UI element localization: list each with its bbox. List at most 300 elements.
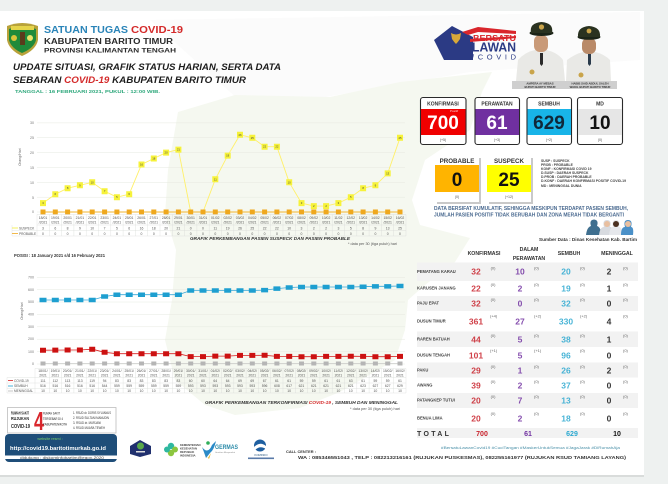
logo: Kominfo: KOMINFO — [254, 453, 268, 457]
chart: confirmed, recovered, deceased: 2021 — [113, 374, 121, 378]
chart: confirmed, recovered, deceased: 10 — [349, 389, 353, 393]
chart: suspeck and probable: 11/02 — [334, 216, 343, 220]
row: Raren Batuah: RAREN BATUAH — [417, 336, 450, 342]
chart: confirmed, recovered, deceased: 10 — [201, 389, 205, 393]
chart: suspeck and probable: 0 — [42, 232, 44, 236]
row: Dusun Timur: 361 — [469, 316, 483, 326]
portrait caption — [512, 81, 617, 89]
chart: confirmed, recovered, deceased: 2021 — [310, 374, 318, 378]
row: Karusen Janang: (0) — [623, 282, 629, 287]
chart: confirmed, recovered, deceased: 593 — [237, 384, 243, 388]
row: Paju Epat: (0) — [623, 297, 629, 302]
row: Karusen Janang: 22 — [471, 284, 481, 294]
chart: confirmed, recovered, deceased: 10 — [66, 389, 70, 393]
chart: suspeck and probable: 0 — [387, 232, 389, 236]
row: Dusun Tengah: 96 — [561, 350, 571, 360]
chart: suspeck and probable: 0 — [251, 232, 253, 236]
chart: suspeck and probable: 5 — [350, 226, 352, 230]
row: Pematang Karau: (0) — [623, 266, 629, 270]
chart: confirmed, recovered, deceased: 83 — [140, 379, 143, 383]
chart: confirmed, recovered, deceased: 2021 — [249, 374, 256, 378]
chart: confirmed, recovered, deceased: 25/01/ — [124, 369, 134, 373]
box: official website: website resmi : — [37, 437, 63, 441]
chart: suspeck and probable: 25 — [250, 226, 254, 230]
chart: confirmed, recovered, deceased: 2021 — [199, 374, 207, 378]
row: Patangkep Tutui: (0) — [580, 394, 586, 399]
chart: suspeck and probable: 21 — [177, 148, 180, 152]
chart: confirmed, recovered, deceased: 30/01/ — [186, 369, 195, 373]
chart: confirmed, recovered, deceased: 27/01/ — [149, 369, 159, 373]
row: Benua Lima: (0) — [534, 411, 540, 416]
row: Karusen Janang: KARUSEN JANANG — [417, 286, 456, 290]
chart: suspeck and probable: /2021 — [347, 220, 355, 224]
chart: suspeck and probable: 25 — [30, 136, 34, 140]
row: Dusun Timur: (0) — [623, 314, 629, 318]
chart: confirmed, recovered, deceased: 621 — [336, 384, 341, 388]
chart: suspeck and probable: /2021 — [199, 220, 207, 224]
chart: confirmed, recovered, deceased: 10 — [177, 389, 180, 393]
chart: confirmed, recovered, deceased: 10 — [361, 389, 365, 393]
chart: confirmed, recovered, deceased: 0 — [32, 362, 34, 366]
chart: suspeck and probable: /2021 — [76, 220, 84, 224]
row: Dusun Tengah: (+1) — [490, 348, 498, 353]
chart: suspeck and probable: 10 — [90, 226, 94, 230]
chart: suspeck and probable: 2 — [325, 226, 327, 230]
portrait: vice regent — [566, 26, 611, 81]
chart: suspeck and probable: 0 — [337, 232, 339, 236]
title — [13, 62, 281, 85]
stat card: sembuh: SEMBUH — [538, 102, 560, 108]
chart: confirmed, recovered, deceased: 16/02/ — [395, 369, 405, 373]
chart: confirmed, recovered, deceased: 61 — [398, 379, 402, 383]
chart: confirmed, recovered, deceased: 2021 — [76, 374, 84, 378]
chart: confirmed, recovered, deceased: 593 — [200, 384, 206, 388]
row: Pematang Karau: 32 — [471, 266, 481, 276]
chart: suspeck and probable: 0 — [128, 232, 130, 236]
heading: task force — [44, 24, 183, 54]
row: Paju Epat: (0) — [534, 297, 540, 302]
row: Awang: 0 — [607, 380, 612, 390]
row: Paku — [417, 364, 629, 376]
chart: confirmed, recovered, deceased: 26/01/ — [137, 369, 146, 373]
chart: suspeck and probable: 0 — [301, 232, 303, 236]
chart: suspeck and probable: 22/01 — [88, 216, 97, 220]
chart: confirmed, recovered, deceased: 20/01/ — [63, 369, 72, 373]
chart: suspeck and probable: 2 — [313, 226, 315, 230]
row: Awang: (0) — [623, 379, 629, 384]
chart: suspeck and probable: PROBABLE — [19, 232, 36, 236]
chart: confirmed, recovered, deceased: 2021 — [138, 374, 145, 378]
chart: confirmed, recovered, deceased: 10 — [152, 389, 156, 393]
row: Patangkep Tutui — [417, 394, 629, 406]
chart: suspeck and probable: 0 — [153, 232, 155, 236]
chart: confirmed, recovered, deceased: 10 — [287, 389, 291, 393]
logo: Kemenkes — [164, 443, 201, 458]
row: Dusun Tengah: (0) — [623, 348, 629, 353]
chart: suspeck and probable: 3 — [301, 226, 303, 230]
row: Benua Lima: BENUA LIMA — [417, 416, 443, 420]
chart: suspeck and probable: /2021 — [310, 220, 318, 224]
row: Paju Epat: 32 — [471, 298, 481, 308]
chart: confirmed, recovered, deceased: 600 — [28, 288, 34, 292]
icon: health workers — [586, 220, 633, 235]
row: Raren Batuah: 44 — [471, 334, 481, 344]
row: Dusun Timur: (+4) — [490, 314, 498, 318]
chart: suspeck and probable: 06/02 — [273, 216, 281, 220]
chart: suspeck and probable — [12, 121, 406, 236]
data source: Sumber Data : Dinas Kesehatan Kab. Bartim — [539, 237, 637, 242]
box: official website: didukung : diskominfobartim@egov-2020 — [20, 456, 104, 460]
row: Patangkep Tutui: PATANGKEP TUTUI — [417, 398, 455, 402]
chart: suspeck and probable: 22 — [263, 226, 267, 230]
chart: suspeck and probable: 10 — [287, 226, 291, 230]
chart: suspeck and probable: 02/02 — [223, 216, 232, 220]
chart: confirmed, recovered, deceased: 04/02/ — [248, 369, 257, 373]
chart: suspeck and probable: 0 — [141, 232, 143, 236]
chart: confirmed, recovered, deceased: 14/02/ — [371, 369, 380, 373]
row: Paju Epat: PAJU EPAT — [417, 300, 440, 306]
chart: suspeck and probable: 30/01 — [186, 216, 195, 220]
chart: confirmed, recovered, deceased: 13/02/ — [358, 369, 368, 373]
row: Dusun Tengah: 0 — [607, 350, 612, 360]
chart: confirmed, recovered, deceased: 09/02/ — [309, 369, 319, 373]
chart: suspeck and probable: 08/02 — [297, 216, 306, 220]
chart: confirmed, recovered, deceased: 2021 — [285, 374, 293, 378]
chart: suspeck and probable: /2021 — [211, 220, 220, 224]
chart: confirmed, recovered, deceased: 28/01/ — [161, 369, 171, 373]
chart: suspeck and probable: 3 — [42, 226, 44, 230]
chart: confirmed, recovered, deceased: 113 — [65, 379, 70, 383]
stat card: probable: (0) — [455, 195, 459, 199]
chart: confirmed, recovered, deceased: 2021 — [335, 374, 342, 378]
chart: confirmed, recovered, deceased: 593 — [225, 384, 231, 388]
chart: confirmed, recovered, deceased: 10 — [127, 389, 131, 393]
chart: suspeck and probable: 6 — [128, 192, 130, 196]
chart: suspeck and probable: 25/01 — [125, 216, 134, 220]
chart: confirmed, recovered, deceased: 559 — [126, 384, 132, 388]
row: Patangkep Tutui: (0) — [534, 394, 540, 399]
row: total: TOTAL — [417, 431, 451, 438]
logo: Bersatu Lawan Covid — [434, 26, 517, 62]
chart: confirmed, recovered, deceased: 10/02/ — [321, 369, 331, 373]
chart: confirmed, recovered, deceased: 10 — [90, 389, 94, 393]
chart: confirmed, recovered, deceased: 2021 — [150, 374, 158, 378]
stat card: suspeck: (+12) — [505, 195, 513, 199]
chart: suspeck and probable: 0 — [104, 232, 106, 236]
chart: suspeck and probable: 11 — [214, 226, 217, 230]
chart: confirmed, recovered, deceased: 10 — [41, 389, 45, 393]
period label: POSISI : 18 January 2021 s/d 16 February 2021 — [14, 253, 106, 258]
chart: confirmed, recovered, deceased: 2021 — [236, 374, 244, 378]
chart: suspeck and probable: /2021 — [100, 220, 109, 224]
logo: GERMAS: GERMAS — [215, 445, 238, 451]
row: Benua Lima: (0) — [491, 411, 496, 416]
row: Dusun Timur — [417, 314, 629, 326]
chart: suspeck and probable: 10 — [288, 180, 291, 184]
row: Paku: (0) — [491, 364, 496, 369]
row: Awang: 2 — [518, 380, 523, 390]
chart: confirmed, recovered, deceased: 2021 — [396, 374, 404, 378]
chart: confirmed, recovered, deceased: 2021 — [39, 374, 47, 378]
chart: suspeck and probable: 22 — [263, 145, 267, 149]
stat card: perawatan: (+3) — [494, 138, 500, 142]
chart: suspeck and probable: /2021 — [125, 220, 134, 224]
chart: confirmed, recovered, deceased: 2021 — [261, 374, 268, 378]
chart: confirmed, recovered, deceased: 59 — [374, 379, 377, 383]
row: Raren Batuah: (0) — [623, 333, 629, 338]
row: Karusen Janang: (0) — [534, 282, 540, 287]
row: total: 700 — [476, 431, 488, 438]
chart: suspeck and probable: 28/01 — [162, 216, 170, 220]
chart: confirmed, recovered, deceased: 2021 — [384, 374, 392, 378]
chart: suspeck and probable: 3 — [301, 201, 303, 205]
box: referral hospitals: 4 — [34, 406, 44, 436]
title: UPDATE SITUASI, GRAFIK STATUS HARIAN, SERTA DATA — [13, 62, 281, 72]
portrait caption: BUPATI BARITO TIMUR — [524, 85, 556, 89]
row: Benua Lima: (0) — [580, 411, 586, 416]
chart: confirmed, recovered, deceased: 593 — [188, 384, 194, 388]
box: official website — [5, 434, 117, 462]
chart: suspeck and probable: 5 — [116, 226, 118, 230]
chart: suspeck and probable: 8 — [67, 186, 69, 190]
row: Benua Lima: 0 — [607, 414, 612, 424]
chart: suspeck and probable: 0 — [350, 232, 352, 236]
chart: suspeck and probable: /2021 — [396, 220, 404, 224]
chart: suspeck and probable: 18 — [152, 226, 156, 230]
chart: confirmed, recovered, deceased: 94 — [103, 379, 107, 383]
box: referral hospitals: RUMAH SAKIT — [11, 410, 29, 416]
chart: confirmed, recovered, deceased: 69 — [250, 379, 254, 383]
chart: suspeck and probable: 19 — [226, 226, 230, 230]
chart: suspeck and probable: 31/01 — [199, 216, 207, 220]
abbreviations legend: D.PROB : DAERAH PROBABLE — [541, 175, 592, 179]
chart: suspeck and probable: 5 — [350, 195, 352, 199]
chart: suspeck and probable: 5 — [32, 196, 34, 200]
chart: suspeck and probable: 0 — [288, 232, 290, 236]
row: Benua Lima: 2 — [518, 414, 523, 424]
chart: confirmed, recovered, deceased: 2021 — [224, 374, 232, 378]
row: Dusun Tengah: 101 — [469, 350, 483, 360]
chart: confirmed, recovered, deceased: 10 — [300, 389, 303, 393]
row: Pematang Karau: (0) — [491, 266, 496, 270]
chart: suspeck and probable: /2021 — [223, 220, 232, 224]
chart: suspeck and probable: 09/02 — [310, 216, 318, 220]
table header: KONFIRMASI — [468, 251, 501, 257]
row: total — [417, 431, 621, 438]
chart: confirmed, recovered, deceased: 2021 — [212, 374, 219, 378]
chart: confirmed, recovered, deceased: 21/01/ — [75, 369, 85, 373]
chart: confirmed, recovered, deceased: 100 — [28, 350, 34, 354]
chart: confirmed, recovered, deceased: 593 — [249, 384, 255, 388]
note: cumulative data: DATA BERSIFAT KUMULATIF, SEHINGGA MESKIPUN TERDAPAT PASIEN SEMBUH, — [434, 206, 628, 212]
chart: confirmed, recovered, deceased: 596 — [262, 384, 268, 388]
note: cumulative data: JUMLAH PASIEN POSITIF TIDAK BERUBAH DAN ZONA MERAH TIDAK BERGANTI — [434, 212, 624, 218]
chart: confirmed, recovered, deceased: 2021 — [175, 374, 182, 378]
chart: suspeck and probable: 0 — [190, 226, 192, 230]
chart: suspeck and probable: 6 — [55, 192, 57, 196]
row: Awang: (0) — [580, 379, 586, 384]
chart: suspeck and probable: 0 — [276, 232, 278, 236]
chart: confirmed, recovered, deceased: 2021 — [359, 374, 367, 378]
chart: suspeck and probable: 16/02 — [396, 216, 404, 220]
chart 2 note: * data per 30 (tiga puluh) hari — [350, 407, 400, 411]
row: Benua Lima: 18 — [561, 414, 571, 424]
chart: confirmed, recovered, deceased: 10 — [312, 389, 316, 393]
chart: suspeck and probable: /2021 — [236, 220, 244, 224]
chart: suspeck and probable: /2021 — [383, 220, 392, 224]
stat card: sembuh: 629 — [533, 113, 565, 134]
box: referral hospitals: KABUPATEN/KOTA — [43, 422, 67, 426]
row: Dusun Timur: DUSUN TIMUR — [417, 318, 446, 324]
chart: confirmed, recovered, deceased: 516 — [77, 384, 83, 388]
chart: suspeck and probable: 16 — [140, 162, 143, 166]
chart: suspeck and probable: 18/01 — [39, 216, 47, 220]
chart: suspeck and probable: 7 — [104, 189, 106, 193]
chart: suspeck and probable: 0 — [54, 232, 56, 236]
chart: confirmed, recovered, deceased: 2021 — [322, 374, 330, 378]
header logo: regency shield — [7, 23, 38, 56]
chart: confirmed, recovered, deceased: 617 — [286, 384, 292, 388]
stat card: MD: 10 — [589, 113, 611, 134]
chart: suspeck and probable: 6 — [128, 226, 130, 230]
row: Dusun Timur: 27 — [515, 316, 525, 326]
row: Paju Epat: 0 — [518, 298, 523, 308]
chart: confirmed, recovered, deceased: 700 — [28, 276, 34, 280]
logo: Bersatu Lawan Covid: /COVID — [472, 52, 517, 62]
table header: PERAWATAN — [513, 256, 545, 262]
chart: suspeck and probable: 25 — [251, 136, 254, 140]
stat card: konfirmasi: KONFIRMASI — [427, 102, 459, 108]
chart: confirmed, recovered, deceased: 559 — [176, 384, 181, 388]
chart: confirmed, recovered, deceased: 10 — [250, 389, 254, 393]
chart: confirmed, recovered, deceased: 621 — [348, 384, 354, 388]
chart: confirmed, recovered, deceased: 15/02/ — [383, 369, 392, 373]
chart: confirmed, recovered, deceased: 59 — [300, 379, 303, 383]
row: Dusun Timur: 330 — [559, 316, 573, 326]
stat card: probable: PROBABLE — [440, 158, 474, 165]
abbreviations legend: KONF : KONFIRMASI COVID 19 — [541, 167, 592, 171]
chart: confirmed, recovered, deceased: 621 — [299, 384, 304, 388]
chart: confirmed, recovered, deceased: 2021 — [64, 374, 71, 378]
chart: suspeck and probable: /2021 — [260, 220, 269, 224]
heading: task force: KABUPATEN BARITO TIMUR — [44, 37, 173, 46]
row: Benua Lima — [417, 411, 629, 424]
chart: suspeck and probable: 10 — [91, 180, 94, 184]
chart: confirmed, recovered, deceased: 2021 — [52, 374, 59, 378]
table header — [468, 247, 634, 262]
logo: GERMAS — [202, 441, 238, 459]
chart: confirmed, recovered, deceased: 83 — [127, 379, 131, 383]
chart: confirmed, recovered, deceased: 559 — [114, 384, 120, 388]
chart: confirmed, recovered, deceased: 02/02/ — [223, 369, 232, 373]
chart: suspeck and probable: 0 — [79, 232, 81, 236]
chart: suspeck and probable: 6 — [54, 226, 56, 230]
chart: confirmed, recovered, deceased: 608 — [274, 384, 280, 388]
chart: suspeck and probable: 22 — [275, 226, 279, 230]
chart: suspeck and probable: 13/02 — [359, 216, 367, 220]
abbreviations legend: D.KONF : DAERAH KONFIRMASI POSITIF COVID-19 — [541, 179, 626, 183]
row: Raren Batuah: 38 — [561, 334, 571, 344]
row: Pematang Karau: (0) — [580, 266, 586, 270]
table: district data — [417, 247, 638, 438]
stat card: suspeck: 25 — [498, 170, 520, 191]
row: Karusen Janang: 1 — [607, 284, 612, 294]
chart: suspeck and probable: /2021 — [174, 220, 183, 224]
chart: confirmed, recovered, deceased: 67 — [263, 379, 267, 383]
title: SEBARAN COVID-19 KABUPATEN BARITO TIMUR — [13, 75, 247, 85]
logo: Bersatu Lawan Covid: LAWAN — [472, 40, 516, 54]
chart: confirmed, recovered, deceased: 29/01/ — [174, 369, 183, 373]
chart: suspeck and probable: 11 — [214, 177, 217, 181]
chart: suspeck and probable: /2021 — [297, 220, 306, 224]
chart: suspeck and probable: 19 — [226, 154, 230, 158]
chart: confirmed, recovered, deceased: 2021 — [372, 374, 379, 378]
chart: confirmed, recovered, deceased: 2021 — [162, 374, 170, 378]
chart: suspeck and probable: 07/02 — [285, 216, 294, 220]
chart: suspeck and probable: 0 — [374, 232, 376, 236]
chart: suspeck and probable: 8 — [67, 226, 69, 230]
chart: confirmed, recovered, deceased — [7, 276, 406, 393]
chart: confirmed, recovered, deceased: 23/01/ — [100, 369, 109, 373]
row: total: 61 — [524, 431, 532, 438]
logo: Kemenkes: KESEHATAN — [180, 446, 197, 450]
box: referral hospitals: COVID-19 — [11, 424, 30, 430]
chart: suspeck and probable: SUSPECK — [19, 226, 35, 230]
chart: suspeck and probable: /2021 — [359, 220, 367, 224]
chart: confirmed, recovered, deceased: 61 — [324, 379, 328, 383]
abbreviations legend: MD : MENINGGAL DUNIA — [541, 184, 582, 188]
chart: suspeck and probable: /2021 — [63, 220, 72, 224]
portrait: regent — [516, 22, 565, 81]
row: Paku: (0) — [623, 364, 629, 369]
chart: confirmed, recovered, deceased: 113 — [77, 379, 83, 383]
chart: suspeck and probable: 29/01 — [174, 216, 183, 220]
chart: confirmed, recovered, deceased: 01/02/ — [211, 369, 220, 373]
chart: suspeck and probable: 13 — [386, 171, 390, 175]
chart: suspeck and probable: 0 — [177, 232, 179, 236]
call center — [286, 450, 626, 461]
chart: suspeck and probable: 01/02 — [211, 216, 220, 220]
chart: suspeck and probable: 13 — [386, 226, 390, 230]
chart: suspeck and probable: 20 — [30, 151, 34, 155]
row: Raren Batuah: 1 — [607, 334, 612, 344]
stat card: konfirmasi: (+5) — [440, 138, 446, 142]
chart: suspeck and probable: 12/02 — [347, 216, 355, 220]
row: Paku: 29 — [471, 366, 481, 376]
chart: suspeck and probable: 0 — [202, 226, 204, 230]
chart: confirmed, recovered, deceased: 593 — [212, 384, 218, 388]
portrait caption: HABIB SAID ABDUL SALEH — [572, 82, 608, 86]
row: Paju Epat: 32 — [561, 298, 571, 308]
chart: suspeck and probable: 20/01 — [63, 216, 72, 220]
abbreviations legend: D.SUSP : DAERAH SUSPECK — [541, 171, 589, 175]
row: Paju Epat — [417, 297, 629, 308]
chart: suspeck and probable: Orang/Hari — [18, 148, 22, 166]
chart: suspeck and probable: 14/02 — [371, 216, 380, 220]
chart: confirmed, recovered, deceased: 516 — [52, 384, 58, 388]
chart: confirmed, recovered, deceased: 516 — [65, 384, 71, 388]
row: Pematang Karau: PEMATANG KARAU — [417, 269, 456, 274]
chart: confirmed, recovered, deceased: 10 — [78, 389, 82, 393]
chart: suspeck and probable: 21/01 — [76, 216, 84, 220]
box: referral hospitals: 4. RSUD MUARA TEWEH — [73, 426, 105, 430]
row: Karusen Janang: 2 — [518, 284, 523, 294]
stat card: probable — [435, 156, 481, 204]
chart: confirmed, recovered, deceased: 61 — [287, 379, 291, 383]
chart: suspeck and probable: 24/01 — [113, 216, 121, 220]
chart: suspeck and probable: 20 — [164, 226, 168, 230]
chart: confirmed, recovered, deceased: 559 — [163, 384, 169, 388]
